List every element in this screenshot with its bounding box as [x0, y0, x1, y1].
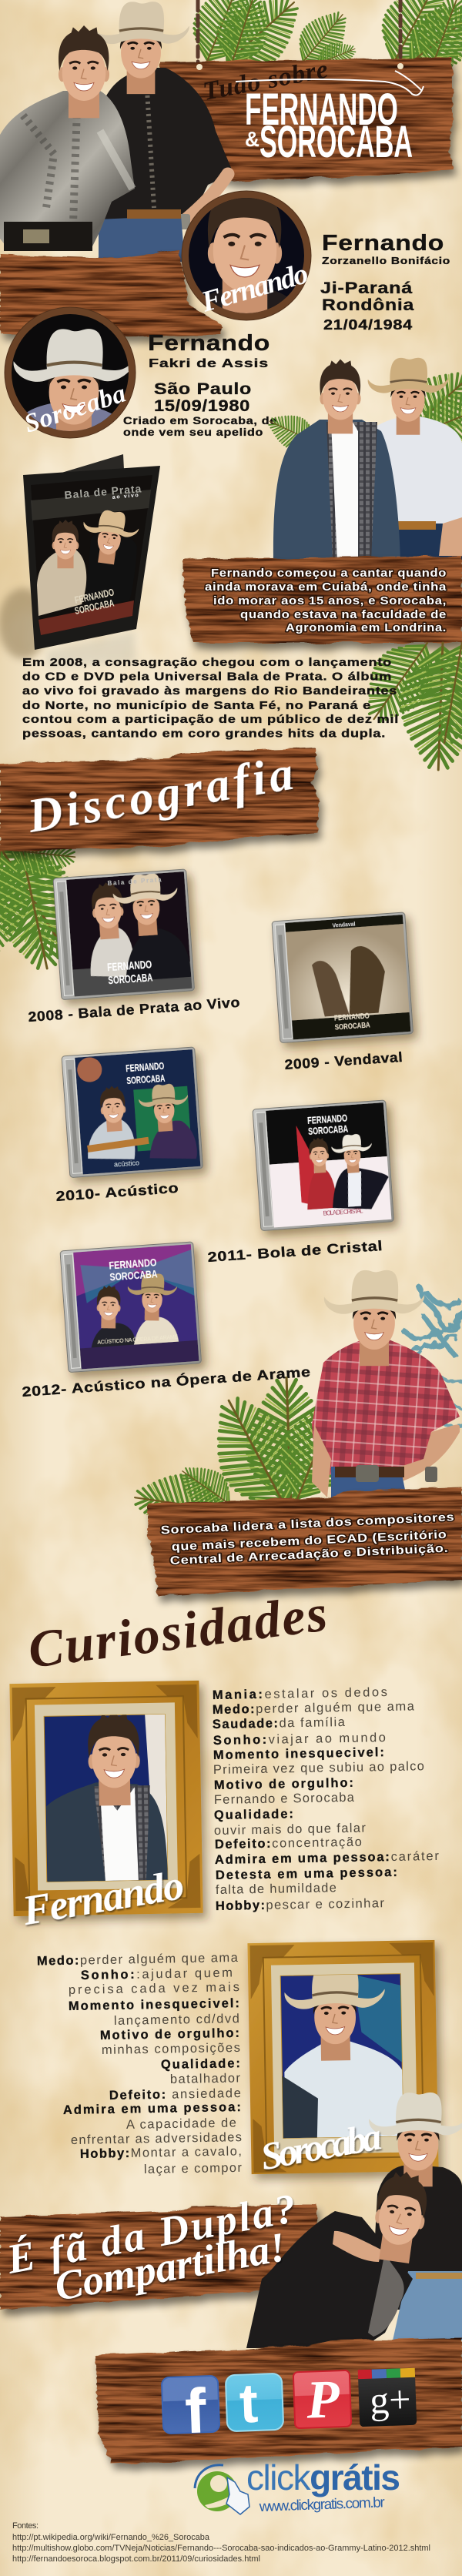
composer text: Sorocaba lidera a lista dos compositores — [160, 1510, 455, 1537]
icon: pinterest: P — [305, 2370, 341, 2430]
hero photo: Fernando in silver shirt — [0, 25, 135, 251]
icon: google plus: g+ — [369, 2377, 411, 2422]
DVD box — [0, 454, 160, 668]
composer text: Central de Arrecadação e Distribuição. — [169, 1542, 449, 1567]
icon: facebook: f — [184, 2376, 208, 2447]
biography: Fernando: Fernando — [322, 231, 444, 256]
Sorocaba curiosities list: Motivo de orgulho: — [100, 2026, 239, 2042]
CD 2009: Vendaval — [332, 922, 356, 929]
biography: Fernando: Zorzanello Bonifácio — [322, 255, 450, 266]
caption 2009: 2009 - Vendaval — [284, 1049, 403, 1072]
CD 2008: SOROCABA — [108, 971, 153, 987]
biography: Fernando: Rondônia — [322, 296, 414, 314]
Sorocaba curiosities list: batalhador — [170, 2071, 241, 2086]
callout text: Agronomia em Londrina. — [286, 621, 447, 634]
frame name: Fernando: Fernando — [18, 1862, 187, 1934]
CD 2012: ACÚSTICO NA ÓPERA DE ARAME — [97, 1333, 179, 1346]
Fernando curiosities list: Primeira vez que subiu ao palco — [213, 1759, 424, 1777]
palm leaves left of discography — [0, 825, 102, 977]
logo mark — [195, 2465, 249, 2514]
biography: Sorocaba: Fakri de Assis — [149, 357, 269, 370]
CD 2011: SOROCABA — [308, 1122, 349, 1137]
DVD cover title: Bala de Prata — [64, 482, 142, 501]
clickgratis logo — [195, 2457, 400, 2515]
CD 2009 — [272, 912, 413, 1043]
title lettering — [201, 55, 424, 167]
Sorocaba curiosities list: Sonho::ajudar quem — [81, 1966, 233, 1982]
CD 2008 — [53, 869, 195, 1000]
Sorocaba curiosities list: Qualidade: — [161, 2056, 240, 2072]
Sorocaba curiosities list: lançamento cd/dvd — [114, 2012, 239, 2028]
Fernando in blue jacket — [273, 359, 400, 562]
discography heading plank — [0, 748, 319, 851]
palm leaves behind top sign — [182, 0, 462, 87]
share plank — [0, 2204, 317, 2310]
icon: twitter: t — [239, 2373, 259, 2435]
tagline: Tudo sobre — [201, 55, 330, 106]
chain rings — [196, 63, 403, 70]
icon: pinterest — [293, 2370, 351, 2430]
biography: Sorocaba: Fernando — [148, 331, 270, 356]
callout text: ainda morava em Cuiabá, onde tinha — [205, 580, 447, 594]
CD 2009: SOROCABA — [334, 1021, 370, 1032]
framed portrait: Sorocaba — [247, 1940, 439, 2174]
caption 2011: 2011- Bola de Cristal — [207, 1238, 383, 1265]
Fernando curiosities list: Mania:estalar os dedos — [213, 1685, 387, 1702]
CD 2008: Bala de Prata — [107, 876, 162, 887]
Fernando curiosities list: Qualidade: — [214, 1807, 293, 1822]
logo ampersand: & — [245, 127, 259, 151]
palm leaves by Sorocaba — [131, 1377, 367, 1540]
biography: Sorocaba — [123, 331, 277, 438]
CD 2009: FERNANDO — [334, 1012, 370, 1023]
CD 2011 — [253, 1100, 394, 1231]
Fernando curiosities list: Medo:perder alguém que ama — [213, 1699, 415, 1717]
water splash — [404, 1287, 462, 1427]
Fernando curiosities list: Detesta em uma pessoa: — [216, 1865, 397, 1882]
Sorocaba curiosities list: Medo:perder alguém que ama — [37, 1951, 239, 1968]
CD 2011: FERNANDO — [307, 1112, 348, 1126]
biography: Fernando: 21/04/1984 — [323, 317, 413, 333]
CD 2010: FERNANDO — [126, 1060, 165, 1074]
Fernando curiosities list — [213, 1685, 440, 1913]
palm leaves right of paragraph — [350, 626, 462, 771]
portrait circle: Fernando — [182, 182, 312, 323]
Fernando curiosities list: Defeito:concentração — [215, 1835, 362, 1852]
Fernando curiosities list: Momento inesquecivel: — [213, 1745, 384, 1762]
frame corner ornaments — [12, 1684, 201, 1911]
sources: http://fernandoesoroca.blogspot.com.br/2011/09/curiosidades.html — [12, 2554, 260, 2564]
career paragraph: pessoas, cantando em coro grandes hits da dupla. — [22, 727, 386, 741]
DVD red band — [38, 601, 134, 635]
composer wooden plank — [148, 1487, 462, 1596]
career paragraph: ao vivo foi gravado às margens do Rio Bandeirantes — [22, 684, 397, 698]
icon: twitter — [226, 2372, 283, 2435]
DVD reflection — [46, 631, 136, 668]
DVD box: ao vivo — [112, 493, 139, 500]
DVD performer: Fernando — [37, 548, 86, 616]
palm leaves behind duo — [263, 354, 462, 505]
portrait name: Sorocaba — [21, 379, 129, 439]
career paragraph — [22, 656, 399, 741]
DVD box: FERNANDO — [74, 586, 115, 606]
curiosities heading: Curiosidades — [25, 1584, 330, 1679]
career paragraph: Em 2008, a consagração chegou com o lançamento — [22, 656, 392, 669]
DVD shadow — [0, 588, 48, 659]
Sorocaba in white shirt — [368, 358, 462, 562]
biography: Sorocaba: 15/09/1980 — [154, 397, 250, 415]
Sorocaba curiosities list: minhas composições — [102, 2041, 240, 2057]
biography: Sorocaba: Criado em Sorocaba, de — [123, 414, 277, 427]
career paragraph: do Norte, no município de Santa Fé, no Paraná e — [22, 699, 371, 712]
share text: Compartilha! — [52, 2223, 289, 2310]
CD 2012: SOROCABA — [109, 1267, 158, 1283]
callout text — [205, 567, 447, 634]
Fernando curiosities list: Fernando e Sorocaba — [214, 1791, 355, 1807]
callout text: Fernando começou a cantar quando — [211, 567, 447, 580]
Sorocaba curiosities list: precisa cada vez mais — [69, 1980, 239, 1997]
social plank — [95, 2338, 462, 2464]
closing photo: Sorocaba in black shirt — [369, 2093, 462, 2340]
career paragraph: contou com a participação de um público de dez mil — [22, 713, 399, 726]
CD 2012: FERNANDO — [109, 1256, 157, 1272]
sources: Fontes: — [12, 2521, 38, 2531]
Fernando curiosities list: Admira em uma pessoa:caráter — [215, 1849, 440, 1867]
sources: http://pt.wikipedia.org/wiki/Fernando_%26_Sorocaba — [12, 2533, 210, 2542]
Fernando curiosities list: Saudade:da família — [213, 1715, 346, 1731]
CD 2012 — [60, 1242, 202, 1373]
portrait name: Fernando — [197, 257, 312, 319]
Sorocaba curiosities list: laçar e compor — [144, 2161, 243, 2176]
frame corner ornaments — [249, 1942, 437, 2173]
Sorocaba curiosities list: Admira em uma pessoa: — [63, 2100, 241, 2117]
icon: facebook — [162, 2376, 220, 2447]
Fernando curiosities list: falta de humildade — [216, 1881, 336, 1897]
Fernando curiosities list: ouvir mais do que falar — [214, 1822, 367, 1838]
Sorocaba curiosities list — [37, 1951, 243, 2176]
Sorocaba photo in red plaid shirt — [312, 1270, 460, 1505]
logo wordmark: clickgrátis — [246, 2457, 400, 2497]
Fernando curiosities list: Sonho:viajar ao mundo — [213, 1731, 386, 1748]
sources — [12, 2521, 430, 2564]
composer text: que mais recebem do ECAD (Escritório — [171, 1528, 447, 1554]
icon: google plus — [358, 2368, 417, 2427]
frame name: Sorocaba: Sorocaba — [257, 2114, 385, 2178]
logo guitar swoosh — [236, 71, 424, 95]
biography: Fernando — [320, 231, 450, 333]
logo url: www.clickgratis.com.br — [258, 2494, 386, 2515]
CD 2010 — [62, 1047, 203, 1178]
hero photo: Sorocaba in black shirt — [92, 2, 233, 262]
biography: Sorocaba: São Paulo — [154, 380, 252, 398]
Sorocaba curiosities list: enfrentar as adversidades — [71, 2130, 242, 2147]
biography: Fernando: Ji-Paraná — [320, 279, 413, 297]
caption 2008: 2008 - Bala de Prata ao Vivo — [28, 995, 241, 1025]
caption 2010: 2010- Acústico — [55, 1180, 179, 1204]
composer text — [160, 1510, 455, 1567]
portrait circle: Sorocaba — [5, 307, 136, 444]
callout text: ido morar aos 15 anos, e Sorocaba, — [213, 594, 447, 607]
wooden callout plank — [183, 556, 462, 643]
Fernando curiosities list: Motivo de orgulho: — [214, 1776, 353, 1792]
share text: É fã da Dupla? — [2, 2185, 300, 2283]
Sorocaba curiosities list: Defeito: ansiedade — [109, 2086, 241, 2103]
DVD box: SOROCABA — [74, 597, 116, 617]
framed portrait: Fernando — [9, 1681, 203, 1916]
social icons — [162, 2368, 417, 2447]
wooden title sign — [159, 58, 454, 181]
duo photo — [273, 358, 462, 562]
DVD performer: Sorocaba — [85, 530, 137, 608]
Fernando curiosities list: Hobby:pescar e cozinhar — [216, 1896, 385, 1913]
caption 2012: 2012- Acústico na Ópera de Arame — [22, 1363, 311, 1400]
Sorocaba curiosities list: A capacidade de — [126, 2116, 236, 2132]
career paragraph: do CD e DVD pela Universal Bala de Prata. O álbum — [22, 670, 392, 684]
biography: Sorocaba: onde vem seu apelido — [123, 426, 263, 438]
sources: http://multishow.globo.com/TVNeja/Noticias/Fernando---Sorocaba-sao-indicados-ao-Grammy-Latino-2012.shtml — [12, 2544, 430, 2553]
CD 2010: SOROCABA — [126, 1072, 166, 1086]
CD 2011: BOLA DE CRISTAL — [323, 1207, 363, 1217]
closing photo: Fernando pointing — [246, 2169, 431, 2348]
callout text: quando estava na faculdade de — [240, 608, 447, 621]
discography heading: Discografia — [23, 748, 297, 843]
CD 2010: acústico — [114, 1159, 139, 1169]
hanging sign chains — [198, 0, 400, 66]
CD 2008: FERNANDO — [107, 958, 152, 974]
Sorocaba curiosities list: Hobby:Montar a cavalo, — [80, 2144, 242, 2161]
Sorocaba curiosities list: Momento inesquecivel: — [69, 1996, 239, 2013]
wooden plank under hero — [0, 250, 223, 337]
